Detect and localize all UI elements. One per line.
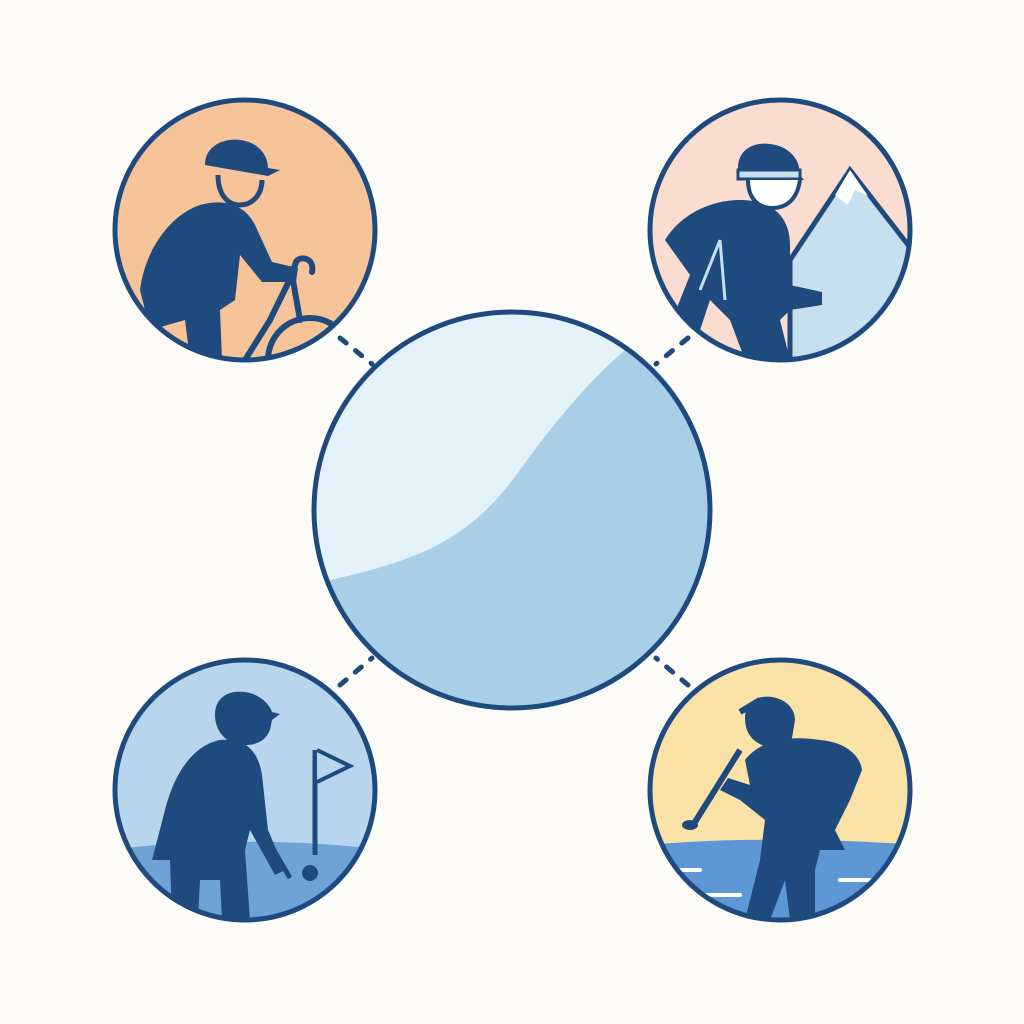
connector dashes bbox=[340, 338, 688, 685]
icon: cyclist bbox=[112, 98, 378, 362]
icon: skier bbox=[648, 98, 912, 362]
central circle bbox=[312, 310, 712, 710]
icon: golfer bbox=[112, 658, 378, 922]
icon: paddler bbox=[648, 658, 912, 922]
